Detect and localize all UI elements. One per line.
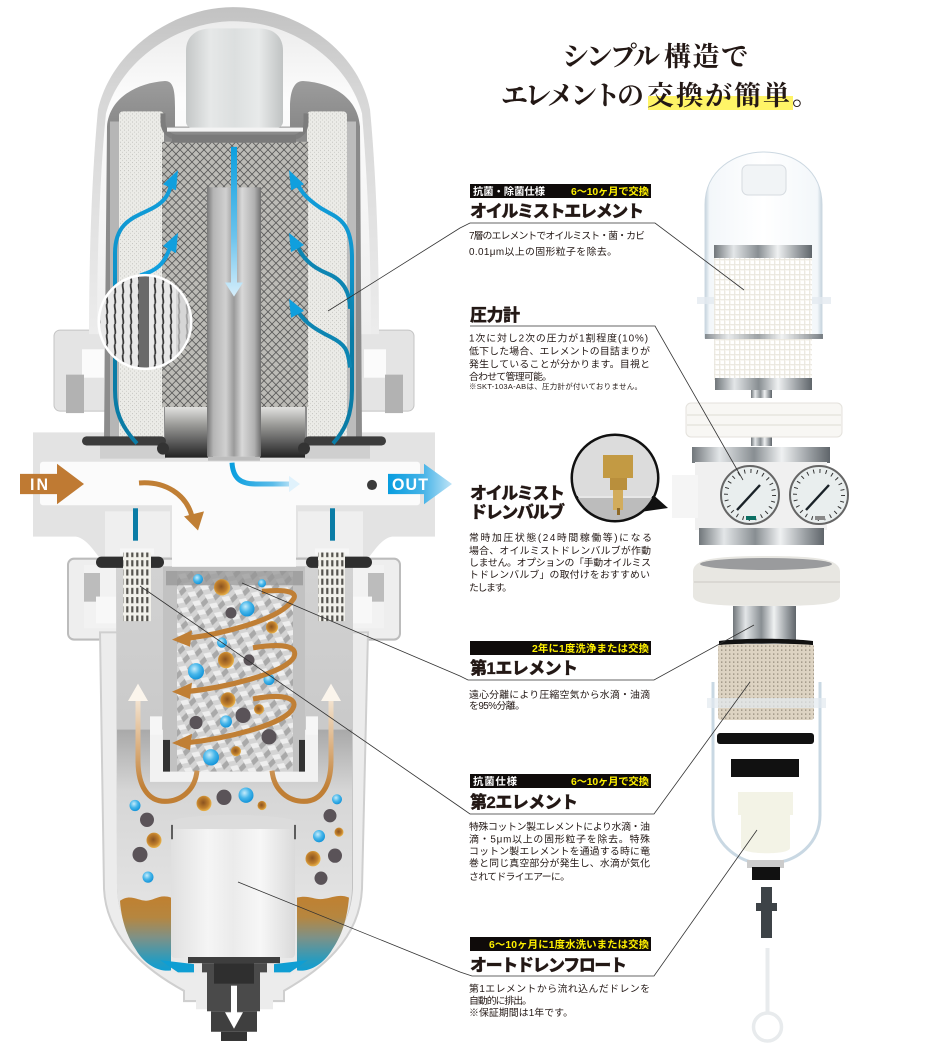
upper body flange [54, 330, 414, 413]
callout: oil mist element: 0.01μm以上の固形粒子を除去。 [469, 245, 617, 258]
arrow: OUT [388, 464, 452, 504]
grid air inlet elements [96, 548, 372, 621]
title: 構造で [664, 42, 748, 72]
leader lines [140, 223, 757, 976]
callout: oil mist element [469, 184, 651, 258]
drain fluid [120, 896, 349, 972]
white ring with stem [686, 403, 842, 446]
manifold with gauges [672, 447, 848, 545]
callout: second element: 第2エレメント [470, 792, 578, 812]
metal seats [165, 407, 305, 458]
inset: drain valve close-up [572, 435, 668, 522]
magnified pleats [99, 275, 191, 369]
callout: auto drain float: 自動的に排出。 [469, 994, 532, 1007]
drain fitting [756, 887, 777, 938]
callout: second element: されてドライエアーに。 [469, 871, 570, 883]
white inlet shroud [172, 499, 296, 567]
arrow: inlet curve [139, 483, 204, 531]
arrows: air flow in upper chamber [115, 170, 352, 443]
arrows: sump upward flow [128, 684, 341, 801]
callout: oil mist element: 7層のエレメントでオイルミスト・菌・カビ [469, 230, 645, 242]
callout: auto drain float: 6〜10ヶ月に1度水洗いまたは交換 [489, 938, 650, 951]
first element spiral filter [150, 567, 318, 782]
pull ring [754, 948, 782, 1041]
top cap cup [186, 28, 283, 130]
auto drain float [170, 815, 296, 958]
callout: oil mist drain valve: 常時加圧状態(24時間稼働等)になる [469, 531, 652, 544]
callout: first element [469, 641, 651, 712]
bubbles [130, 574, 344, 885]
oil mist element [705, 245, 823, 398]
upper arrows and magnifier [20, 147, 452, 531]
callout: second element: コットン製エレメントを通過する時に竜 [469, 844, 650, 858]
manifold body [33, 432, 435, 563]
callout: pressure gauge: 低下した場合、エレメントの目詰まりが [469, 344, 650, 358]
arrows: spiral flow [172, 591, 295, 750]
lower clear bowl [707, 682, 826, 880]
inner liner [104, 81, 362, 441]
arrow head: outlet turn [289, 476, 300, 492]
callout: oil mist drain valve: しません。オプションの「手動オイルミス [469, 556, 651, 569]
cutaway filter diagram [20, 7, 452, 1041]
callout: second element: 滴・5μm以上の固形粒子を除去。特殊 [469, 832, 650, 846]
o-rings [82, 436, 386, 461]
callout: second element: 6〜10ヶ月で交換 [571, 775, 650, 788]
pressure gauge 1 [721, 466, 779, 524]
callout: oil mist drain valve: トドレンバルブ」の取付けをおすすめい [469, 568, 650, 581]
drain outlet [188, 957, 280, 1041]
callout: pressure gauge: 1次に対し2次の圧力が1割程度(10%) [469, 332, 648, 344]
lower flange [68, 559, 400, 640]
first element metal cylinder [733, 606, 796, 646]
title [501, 42, 819, 111]
arrow: OUT: OUT [392, 476, 428, 494]
arrow: IN: IN [30, 476, 48, 494]
arrow: down through centre tube [225, 147, 243, 297]
callout: pressure gauge: 合わせて管理可能。 [469, 370, 552, 383]
callout: oil mist element: 6〜10ヶ月で交換 [571, 185, 650, 198]
callout: first element: 2年に1度洗浄または交換 [532, 642, 650, 655]
callout: oil mist element: 抗菌・除菌仕様 [473, 185, 546, 198]
second element cotton [718, 639, 814, 720]
centre tube [207, 187, 261, 457]
upper glass dome [89, 7, 379, 334]
title: エレメントの [501, 81, 644, 111]
callout: first element: 遠心分離により圧縮空気から水滴・油滴 [469, 688, 650, 701]
arrow: IN [20, 464, 84, 504]
oil mist element pleated filter [119, 111, 347, 446]
callout: second element: 巻と同じ真空部分が発生し、水滴が気化 [469, 856, 650, 870]
callout: pressure gauge: 発生していることが分かります。目視と [469, 358, 650, 370]
callout: oil mist drain valve [469, 484, 652, 594]
threaded white ring [693, 556, 840, 606]
callout: oil mist drain valve: たします。 [469, 582, 512, 594]
callout: second element [469, 774, 651, 883]
callout: auto drain float: 第1エレメントから流れ込んだドレンを [469, 982, 650, 995]
callout: oil mist drain valve: 場合、オイルミストドレンバルブが作動 [469, 544, 651, 557]
exploded product photo [672, 152, 848, 1041]
lower glass bowl [100, 566, 368, 1001]
callout: oil mist drain valve: オイルミスト [470, 484, 565, 503]
callout: pressure gauge: 圧力計 [470, 305, 520, 325]
title highlight [648, 96, 793, 110]
callout: second element: 抗菌仕様 [473, 775, 518, 788]
callout: auto drain float: オートドレンフロート [470, 956, 627, 975]
callout: first element: を95%分離。 [469, 699, 525, 712]
callout: pressure gauge [469, 305, 650, 391]
lower half of cutaway [68, 499, 400, 1041]
callout: oil mist drain valve: ドレンバルブ [470, 502, 565, 522]
callout: auto drain float: ※保証期間は1年です。 [469, 1006, 573, 1019]
callout: oil mist element: オイルミストエレメント [470, 202, 644, 221]
callout: pressure gauge: ※SKT-103A-ABは、圧力計が付いておりません。 [469, 381, 642, 391]
pressure gauge 2 [790, 466, 848, 524]
upper half of cutaway [33, 7, 435, 563]
callout: first element: 第1エレメント [470, 658, 578, 678]
title: 交換が簡単。 [647, 81, 819, 111]
callout: auto drain float [469, 937, 651, 1019]
oil mist element bowl [697, 152, 831, 338]
arrow: outlet turn [232, 463, 290, 484]
callout: second element: 特殊コットン製エレメントにより水滴・油 [469, 820, 650, 833]
title: シンプル [562, 42, 660, 72]
